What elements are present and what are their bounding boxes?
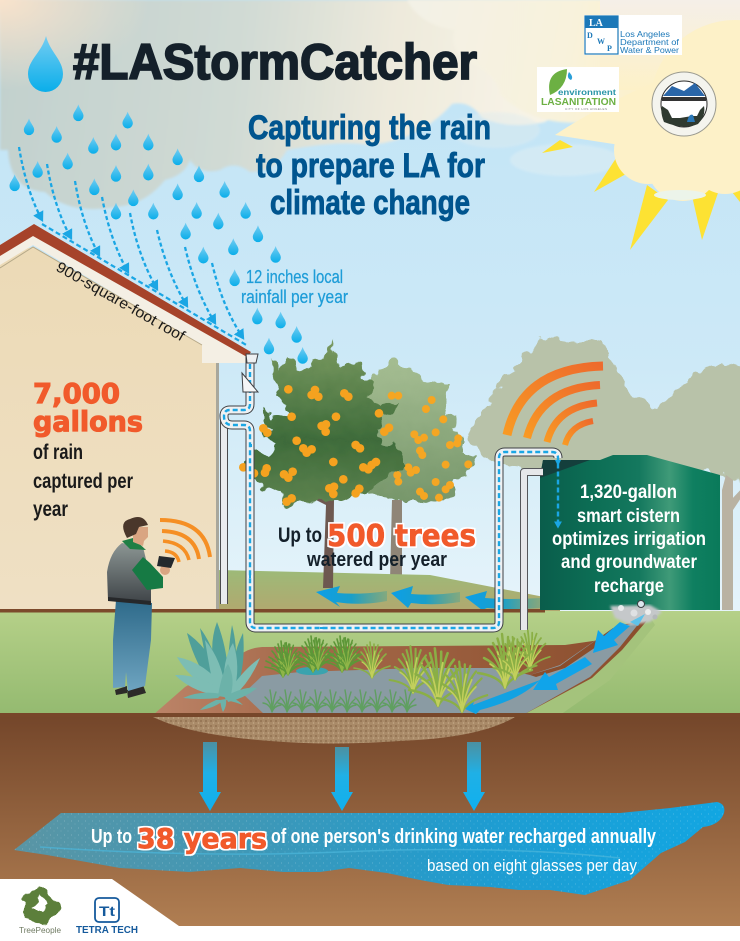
cistern label: 1,320-gallon: [580, 482, 677, 503]
subtitle: to prepare LA for: [256, 147, 485, 185]
stat: gallons captured: gallons: [33, 405, 143, 438]
man with tablet: [107, 517, 175, 698]
logo: LADWP: Water & Power: [620, 45, 679, 55]
groundwater aquifer: [14, 802, 724, 895]
subtitle: Capturing the rain: [248, 109, 491, 147]
background sky: [0, 0, 740, 612]
icon: cistern wifi signal: [507, 366, 603, 445]
logo: Tetra Tech: [76, 898, 138, 936]
green lawn under swale: [523, 617, 655, 715]
raindrops: [9, 104, 308, 364]
stat: drinking water recharged: Up to: [91, 826, 132, 848]
basin gravel lens: [153, 717, 515, 744]
stat: gallons captured: captured per: [33, 470, 133, 493]
outlet: [638, 600, 644, 608]
icon: title water drop: [28, 36, 63, 92]
logo: LADWP: Los Angeles: [620, 29, 670, 39]
stat: drinking water recharged: based on eight glasses per day: [427, 856, 637, 875]
front tree oranges: [239, 385, 393, 506]
sleeve: [132, 557, 163, 590]
logo: LADWP: LA: [589, 18, 604, 29]
logo: LADWP: Department of: [620, 37, 680, 47]
shoes: [115, 685, 146, 698]
sun rays: [542, 140, 740, 250]
roof flow line: [42, 224, 248, 346]
lower sprigs: [263, 690, 416, 712]
tablet: [157, 556, 175, 568]
title: #LAStormCatcher: [73, 34, 477, 90]
red roof: [0, 224, 251, 357]
logo: LA Sanitation: LASANITATION: [541, 96, 616, 108]
overflow pipes: [224, 412, 543, 630]
cistern label: optimizes irrigation: [552, 529, 706, 550]
swale and basin stones: [243, 622, 640, 715]
sun: [555, 20, 740, 201]
jacket: [107, 543, 151, 605]
house wall: [0, 247, 217, 611]
basin pool: [296, 667, 328, 675]
stat: trees watered: [278, 519, 476, 571]
arrows: infiltration to aquifer: [199, 742, 485, 811]
gutter and diverter: [242, 354, 258, 392]
stat: trees watered: watered per year: [306, 549, 447, 571]
ground lawn: [0, 611, 740, 715]
face: [133, 527, 148, 546]
cistern label: recharge: [594, 576, 664, 597]
storm cloud: [0, 0, 740, 209]
stat: gallons captured: year: [33, 498, 68, 521]
logo: Tetra Tech: Tt: [99, 903, 115, 919]
rainfall label: [241, 267, 348, 307]
stat: drinking water recharged: of one person's drinking water recharged annually: [271, 826, 657, 848]
rock splash pad: [610, 600, 662, 626]
house: [0, 224, 251, 611]
logo: LADWP: [584, 15, 682, 55]
logo: LADWP: D: [587, 31, 593, 40]
faded background trees: [467, 337, 740, 480]
ground line: [0, 609, 545, 612]
soil: [0, 715, 740, 926]
back orange tree: [360, 360, 477, 581]
upper grass clumps: [265, 630, 550, 712]
garden bed: [0, 617, 740, 717]
bottom white strip: [0, 879, 740, 941]
logo: Tetra Tech: TETRA TECH: [76, 925, 138, 936]
jeans: [113, 600, 152, 691]
bed soil: [153, 620, 650, 715]
plants: [175, 622, 550, 712]
rain water pipe with flow: [224, 356, 558, 628]
rainfall label: 12 inches local: [246, 267, 343, 287]
logo: TreePeople: [19, 888, 62, 935]
back lawn hill: [217, 570, 560, 611]
logo: LA Sanitation: CITY OF LOS ANGELES: [565, 107, 607, 111]
stat: trees watered: Up to: [278, 524, 322, 547]
logo: LA Sanitation: [537, 67, 619, 112]
collar: [122, 538, 146, 550]
subtitle: climate change: [270, 184, 470, 222]
agave: [175, 622, 260, 712]
logo: county flood control seal: [652, 72, 716, 136]
back tree oranges: [388, 392, 472, 502]
faded tree trunk right: [722, 475, 740, 610]
logo: LADWP: W: [597, 37, 605, 46]
front orange tree: [239, 340, 407, 588]
cistern: [540, 455, 720, 610]
hand: [160, 565, 170, 575]
base line: [0, 713, 740, 717]
roof fascia: [0, 224, 250, 363]
stat: drinking water recharged: [91, 822, 657, 875]
cistern label: and groundwater: [561, 552, 698, 573]
stat: drinking water recharged: 38 years: [137, 822, 267, 855]
stat: gallons captured: of rain: [33, 441, 83, 464]
rainfall label: rainfall per year: [241, 287, 348, 307]
cistern label: [552, 482, 706, 597]
logo: LADWP: P: [607, 44, 612, 53]
stat: trees watered: 500 trees: [327, 519, 476, 554]
hair: [123, 517, 148, 538]
stat: gallons captured: [33, 378, 143, 521]
roof area label: 900-square-foot roof: [53, 259, 188, 345]
logo: TreePeople: TreePeople: [19, 926, 62, 935]
swale water arrows: [463, 622, 630, 714]
stat: gallons captured: 7,000: [33, 378, 120, 410]
logo: LA Sanitation: environment: [558, 88, 616, 97]
rain flow arrows: [19, 147, 243, 338]
arrows: irrigation flow to trees: [316, 586, 540, 610]
icon: tablet wifi signal: [160, 520, 210, 562]
cistern label: smart cistern: [577, 506, 680, 527]
subtitle: [248, 109, 491, 222]
